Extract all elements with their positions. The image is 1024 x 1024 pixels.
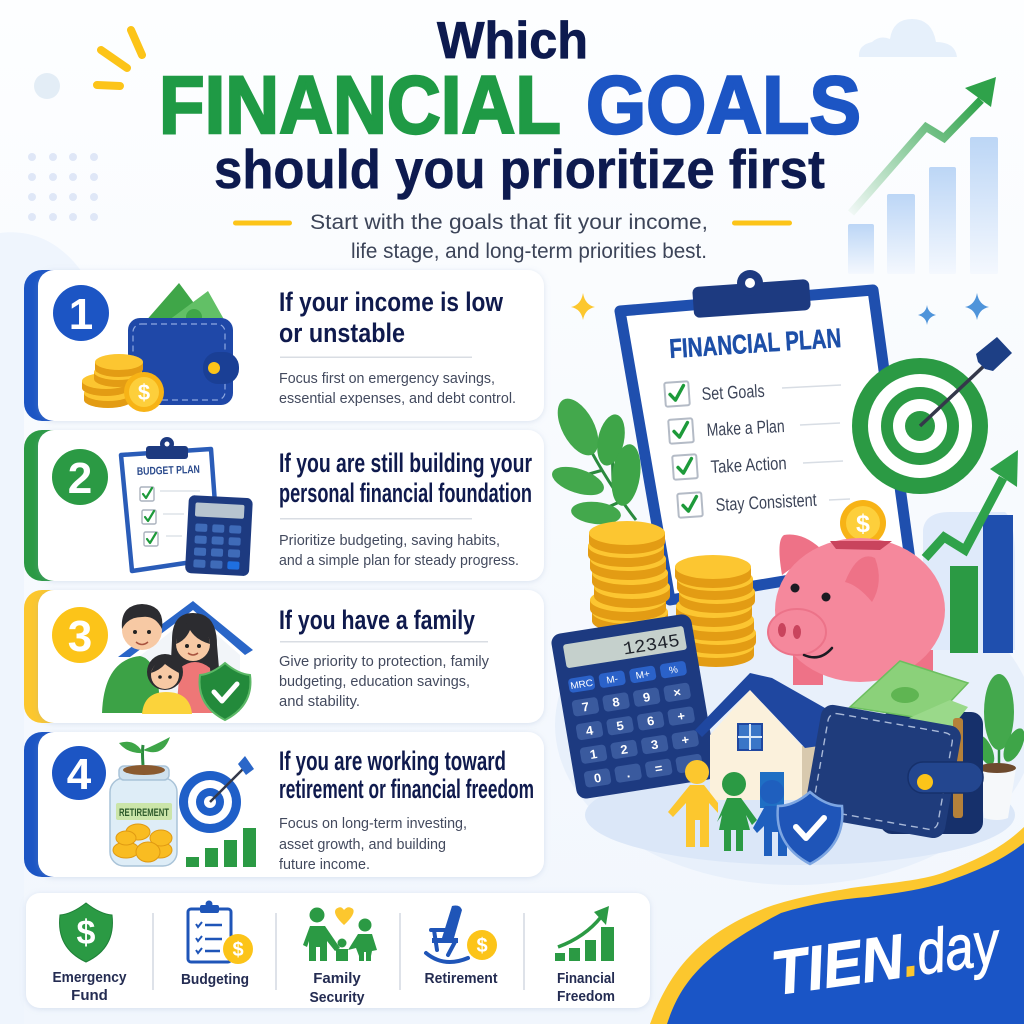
icon: budget plan clipboard and calculator: BUDGET PLAN bbox=[137, 464, 200, 478]
card 2 body: and a simple plan for steady progress. bbox=[279, 552, 519, 569]
checklist: Take Action bbox=[710, 453, 787, 477]
item: emergency fund: Fund bbox=[71, 987, 108, 1004]
coin entering slot: $ bbox=[856, 510, 870, 538]
card 3 heading: If you have a family bbox=[279, 605, 475, 635]
coin entering slot bbox=[840, 500, 886, 546]
card 2: building financial foundation bbox=[24, 430, 544, 581]
item: retirement bbox=[424, 906, 498, 987]
brand corner bbox=[650, 827, 1024, 1024]
calculator: 6 bbox=[646, 713, 655, 729]
calculator: 12345 bbox=[622, 630, 681, 660]
calculator: 9 bbox=[642, 689, 651, 705]
checklist bbox=[664, 381, 850, 518]
subtitle: Start with the goals that fit your income, bbox=[310, 211, 708, 234]
left background blob bbox=[0, 232, 82, 1024]
wallet with banknotes bbox=[803, 661, 983, 840]
calculator: 0 bbox=[593, 770, 602, 786]
green figure bbox=[717, 772, 757, 851]
calculator: 2 bbox=[619, 741, 629, 757]
calculator: + bbox=[680, 732, 690, 748]
yellow figure bbox=[668, 760, 718, 847]
bottom icon panel bbox=[26, 893, 650, 1008]
item: retirement: $ bbox=[476, 935, 488, 957]
clipboard heading: FINANCIAL PLAN bbox=[668, 323, 842, 364]
card 2 heading: personal financial foundation bbox=[279, 478, 532, 508]
card 4 heading bbox=[279, 746, 534, 804]
card 4 body: asset growth, and building bbox=[279, 836, 446, 853]
father bbox=[102, 604, 162, 713]
plant left bbox=[549, 392, 644, 527]
card 3 body bbox=[279, 653, 489, 710]
calculator: 5 bbox=[615, 718, 625, 733]
potted plant bbox=[972, 674, 1024, 820]
card 1 body: Focus first on emergency savings, bbox=[279, 370, 495, 387]
calculator: 3 bbox=[650, 737, 659, 752]
card 3: family bbox=[24, 590, 544, 723]
family shield bbox=[200, 663, 250, 720]
item: financial freedom: Financial bbox=[557, 970, 615, 987]
decoration: top-right cloud and growth chart bbox=[848, 19, 998, 274]
checklist: Make a Plan bbox=[706, 416, 785, 440]
number badge 4 bbox=[52, 746, 106, 800]
number badge 4: 4 bbox=[67, 750, 92, 799]
blue figure bbox=[753, 780, 787, 856]
number badge 2: 2 bbox=[68, 454, 92, 503]
number badge 3 bbox=[52, 607, 108, 663]
calculator: M- bbox=[606, 674, 619, 686]
family figures bbox=[668, 760, 787, 856]
ground shadow bbox=[585, 765, 1015, 865]
coin stack left bbox=[588, 521, 670, 633]
coin stack right bbox=[675, 555, 756, 667]
icon: family with house and shield bbox=[102, 601, 253, 720]
back chart: bars and green arrow bbox=[923, 450, 1018, 653]
title line: should you prioritize first: should you prioritize first bbox=[214, 138, 825, 200]
calculator: × bbox=[672, 684, 682, 700]
item: financial freedom bbox=[555, 906, 615, 1005]
icon: budget plan clipboard and calculator bbox=[121, 437, 253, 576]
title word: GOALS: GOALS bbox=[586, 60, 861, 151]
card 1 body: essential expenses, and debt control. bbox=[279, 390, 516, 407]
subtitle bbox=[233, 211, 792, 263]
item: budgeting: $ bbox=[232, 939, 244, 961]
calculator: = bbox=[654, 760, 664, 776]
mother bbox=[170, 613, 220, 713]
item: family security bbox=[303, 907, 377, 1006]
item: budgeting bbox=[181, 900, 253, 988]
item: financial freedom: Freedom bbox=[557, 988, 615, 1005]
decoration: top-left accents bbox=[28, 30, 142, 221]
item: family security: Security bbox=[310, 989, 365, 1006]
title word: FINANCIAL: FINANCIAL bbox=[159, 60, 561, 151]
number badge 2 bbox=[52, 449, 108, 505]
child bbox=[142, 654, 192, 714]
icon: retirement jar with sprout bbox=[110, 737, 177, 866]
calculator: 1 bbox=[589, 746, 598, 762]
calculator: 4 bbox=[585, 722, 595, 738]
sparkles bbox=[571, 293, 989, 325]
calculator: 7 bbox=[581, 699, 590, 715]
title line: Which: Which bbox=[437, 12, 588, 70]
icon: wallet with cash and coins bbox=[82, 283, 239, 412]
card 2 body: Prioritize budgeting, saving habits, bbox=[279, 532, 500, 549]
item: family security: Family bbox=[313, 970, 361, 987]
card 4 body: future income. bbox=[279, 856, 370, 873]
shield with check bbox=[778, 792, 842, 864]
card 1 heading bbox=[279, 287, 504, 348]
card 4 heading: If you are working toward bbox=[279, 746, 506, 776]
card 1 heading: If your income is low bbox=[279, 287, 504, 317]
calculator: + bbox=[676, 708, 686, 724]
item: retirement: Retirement bbox=[424, 970, 498, 987]
calculator: MRC bbox=[570, 678, 594, 692]
card 3 body: budgeting, education savings, bbox=[279, 673, 470, 690]
card 1 heading: or unstable bbox=[279, 318, 405, 348]
number badge 1: 1 bbox=[69, 290, 93, 339]
icon: wallet with cash and coins: $ bbox=[138, 380, 150, 405]
card 2 heading: If you are still building your bbox=[279, 448, 532, 478]
target with arrow bbox=[852, 337, 1012, 494]
calculator: M+ bbox=[635, 669, 651, 682]
calculator: % bbox=[668, 664, 679, 677]
card 3 body: Give priority to protection, family bbox=[279, 653, 489, 670]
card 3 body: and stability. bbox=[279, 693, 360, 710]
checklist: Stay Consistent bbox=[715, 490, 817, 515]
card 1 body bbox=[279, 370, 516, 407]
icon: blue target and green bars bbox=[179, 756, 256, 867]
number badge 1 bbox=[53, 285, 109, 341]
item: emergency fund: Emergency bbox=[52, 969, 127, 986]
card 2 body bbox=[279, 532, 519, 569]
number badge 3: 3 bbox=[68, 612, 92, 661]
calculator: 8 bbox=[611, 694, 621, 710]
icon: retirement jar with sprout: RETIREMENT bbox=[119, 807, 169, 819]
checklist: Set Goals bbox=[701, 381, 765, 404]
item: budgeting: Budgeting bbox=[181, 971, 249, 988]
subtitle: life stage, and long-term priorities best. bbox=[351, 240, 707, 263]
house bbox=[695, 673, 832, 808]
card 2 heading bbox=[279, 448, 532, 508]
calculator bbox=[550, 613, 718, 800]
piggy bank bbox=[768, 500, 945, 685]
calculator: . bbox=[625, 765, 631, 781]
scene ground bbox=[555, 565, 1024, 885]
card 4 heading: retirement or financial freedom bbox=[279, 774, 534, 804]
clipboard bbox=[620, 270, 910, 600]
brand text: TIEN.day bbox=[767, 908, 1006, 1009]
card 1: low or unstable income bbox=[24, 270, 544, 421]
item: emergency fund bbox=[52, 903, 127, 1004]
card 4: retirement or financial freedom bbox=[24, 732, 544, 877]
illustration: financial plan scene bbox=[549, 270, 1024, 885]
card 4 body: Focus on long-term investing, bbox=[279, 815, 467, 832]
title bbox=[159, 12, 861, 200]
card 4 body bbox=[279, 815, 467, 873]
item: emergency fund: $ bbox=[77, 914, 96, 952]
